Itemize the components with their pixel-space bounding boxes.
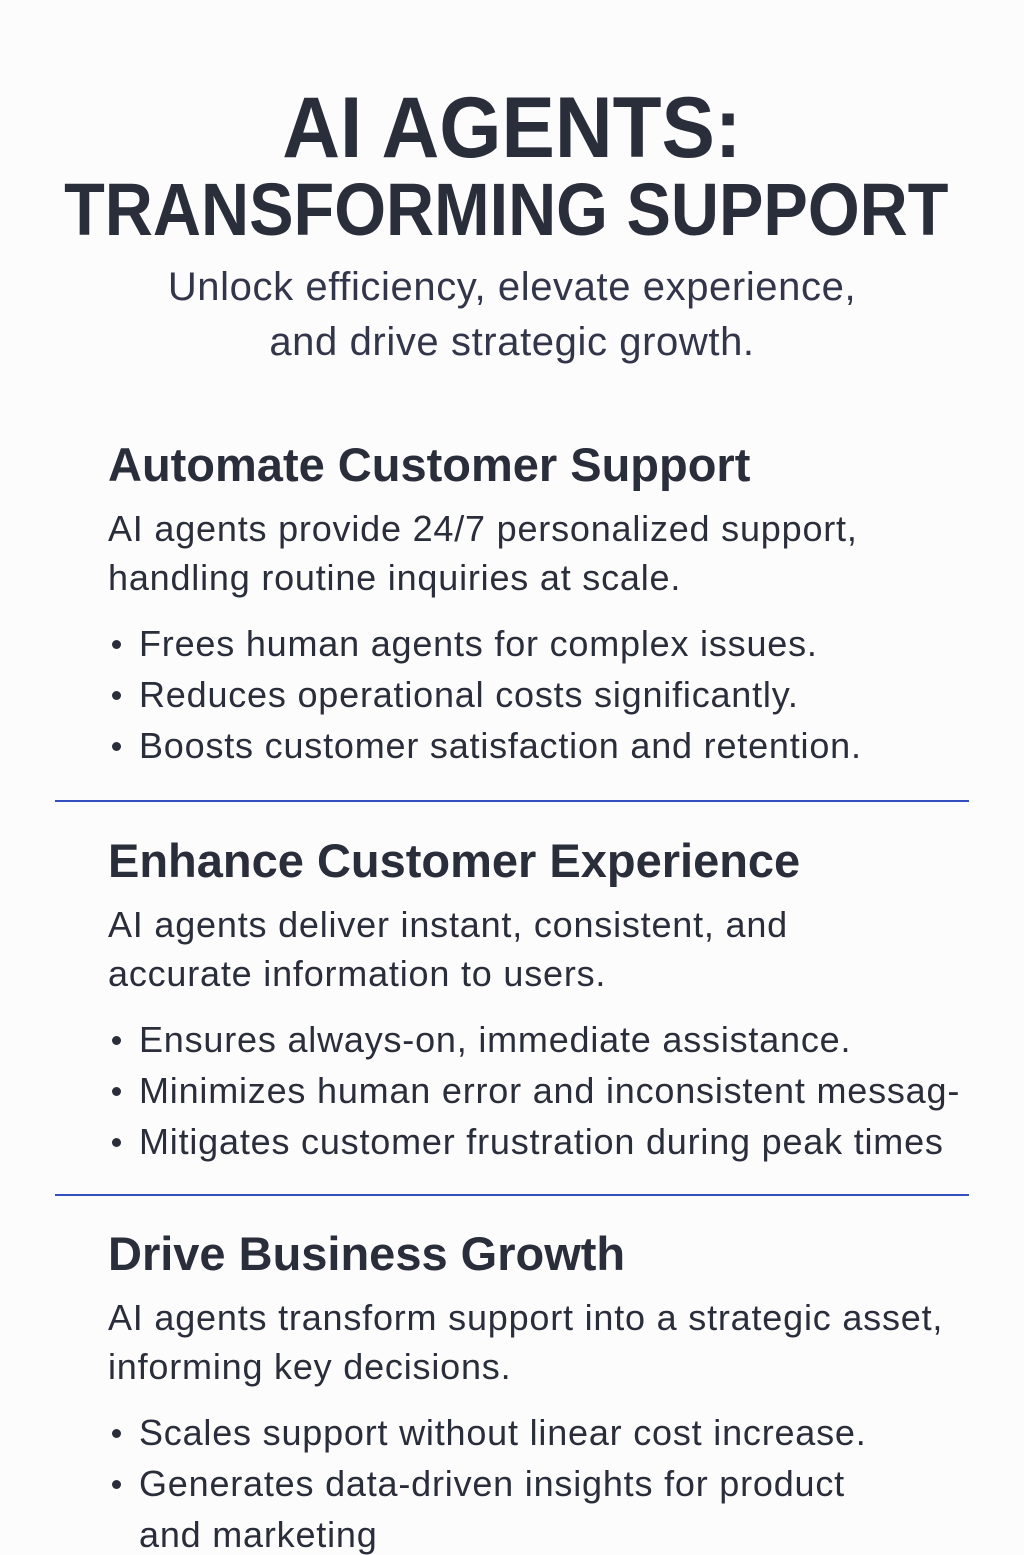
- body text: [108, 508, 858, 598]
- bullet list: Generates data-driven insights for product: [139, 1463, 845, 1504]
- bullet list: [112, 623, 862, 766]
- bullet list: [112, 1412, 867, 1555]
- bullet list: Mitigates customer frustration during peak times: [139, 1121, 944, 1162]
- heading: Enhance Customer Experience: [108, 834, 800, 887]
- body text: accurate information to users.: [108, 953, 606, 994]
- subtitle: [168, 265, 856, 364]
- panel: automate: [108, 438, 862, 766]
- bullet list: and marketing: [139, 1514, 378, 1555]
- title line 2: TRANSFORMING SUPPORT: [64, 168, 948, 251]
- body text: [108, 1297, 943, 1387]
- bullet list: Boosts customer satisfaction and retention.: [139, 725, 862, 766]
- heading: Drive Business Growth: [108, 1227, 625, 1280]
- subtitle: Unlock efficiency, elevate experience,: [168, 265, 856, 309]
- panel: growth: [108, 1227, 943, 1555]
- bullet list: Reduces operational costs significantly.: [139, 674, 799, 715]
- body text: handling routine inquiries at scale.: [108, 557, 681, 598]
- body text: [108, 904, 788, 994]
- body text: informing key decisions.: [108, 1346, 511, 1387]
- body text: AI agents provide 24/7 personalized support,: [108, 508, 858, 549]
- bullet list: Scales support without linear cost increase.: [139, 1412, 867, 1453]
- body text: AI agents transform support into a strategic asset,: [108, 1297, 943, 1338]
- heading: Automate Customer Support: [108, 438, 750, 491]
- title line 1: AI AGENTS:: [282, 80, 742, 176]
- bullet list: Frees human agents for complex issues.: [139, 623, 818, 664]
- body text: AI agents deliver instant, consistent, and: [108, 904, 788, 945]
- title: [64, 80, 948, 251]
- bullet list: [112, 1019, 960, 1162]
- bullet list: Ensures always-on, immediate assistance.: [139, 1019, 851, 1060]
- bullet list: Minimizes human error and inconsistent messag-: [139, 1070, 960, 1111]
- panel: experience: [108, 834, 960, 1162]
- subtitle: and drive strategic growth.: [269, 320, 755, 364]
